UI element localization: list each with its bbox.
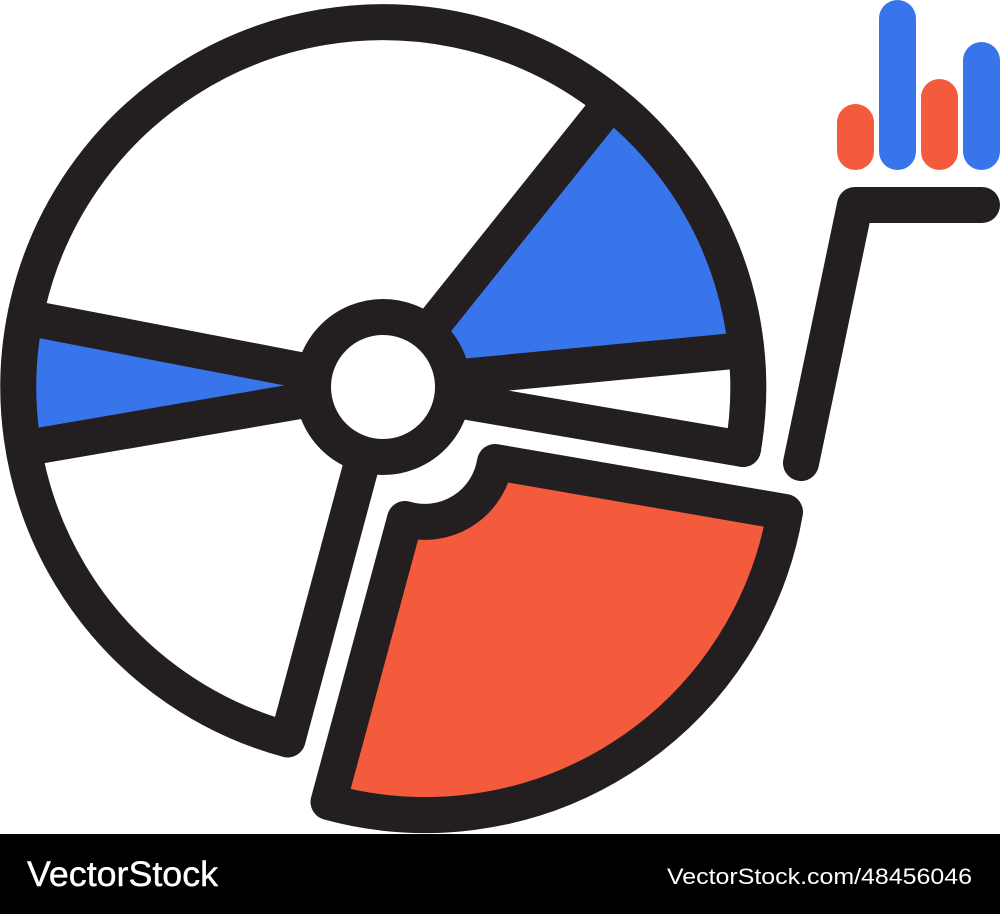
orange detached pie slice: [328, 462, 785, 815]
footer brand: VectorStock: [27, 855, 219, 894]
bar 4: [963, 42, 1000, 170]
blue wedge: upper right: [437, 116, 745, 378]
icon: pie chart disc: [18, 22, 748, 739]
chart axis line: [801, 205, 982, 463]
outer ring arc: [18, 22, 748, 739]
center hub: [313, 317, 453, 457]
blue wedge: left: [25, 319, 300, 447]
footer bar: [0, 834, 1000, 914]
bar chart: [837, 0, 1000, 170]
bar 1: [837, 104, 874, 170]
bar 3: [921, 79, 958, 170]
spokes: [32, 116, 745, 739]
footer url: VectorStock.com/48456046: [667, 864, 972, 889]
bar 2: [879, 0, 916, 170]
